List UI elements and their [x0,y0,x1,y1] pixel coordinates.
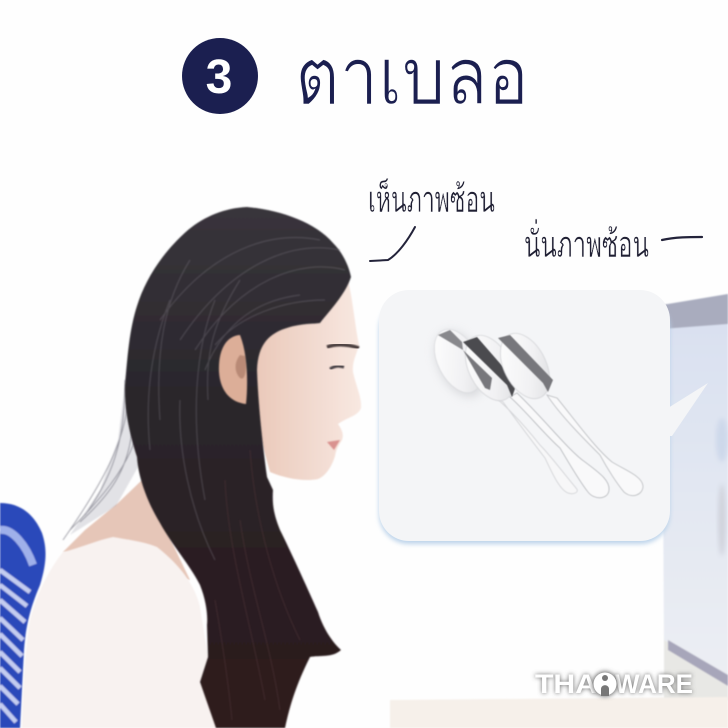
neck [63,480,190,580]
eyebrow [327,345,359,348]
bubble shadow [379,299,670,544]
bubble tail [668,383,708,436]
watermark logo: THA [535,669,597,699]
spoon left [425,322,577,494]
dark hair strands [215,450,300,720]
spoons [425,322,643,498]
watermark logo: WARE [615,669,693,699]
lips [327,440,340,450]
chair [0,503,46,728]
spoon right [490,325,643,496]
annotation: double image: เห็นภาพซ้อน [368,176,495,220]
hair [125,207,351,728]
number badge [182,38,258,114]
ear [219,335,247,404]
logo icon [592,672,618,696]
white shirt [22,537,222,728]
hair highlights [148,238,345,560]
watermark logo [535,669,693,699]
monitor [662,294,728,700]
annotation: ghosting: นั่นภาพซ้อน [524,218,649,265]
annotation: double image [368,176,495,261]
watermark logo: WARE [615,669,693,699]
watermark logo: THA [535,669,597,699]
desk [390,697,728,728]
speech bubble [379,290,708,544]
spoon middle [455,327,609,498]
woman [22,207,361,728]
eye [330,366,344,369]
title text: ตาเบลอ [295,32,529,121]
wispy hair strands [63,375,142,540]
bubble panel [379,290,670,541]
title [182,32,529,121]
face [250,270,361,480]
number badge: 3 [206,51,232,104]
